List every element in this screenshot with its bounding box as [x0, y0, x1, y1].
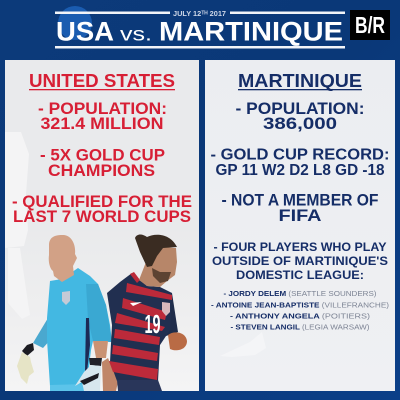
text: FIFA membership — [222, 192, 378, 225]
text: gold cup record — [210, 146, 390, 179]
player: striped jersey forward — [107, 234, 187, 391]
heading: Martinique: MARTINIQUE — [238, 70, 362, 91]
arm and sleeve — [166, 292, 178, 336]
list of players: - JORDY DELEM (SEATTLE SOUNDERS) — [224, 289, 376, 298]
shorts — [50, 384, 87, 391]
icon: faded soccer ball — [58, 6, 92, 40]
text: population: - POPULATION: — [236, 100, 364, 118]
swoosh — [130, 302, 142, 306]
text: four players: DOMESTIC LEAGUE: — [236, 268, 364, 282]
number 19: 19 — [144, 309, 160, 339]
stripes — [109, 283, 172, 380]
text: FIFA membership: FIFA — [278, 207, 322, 225]
header — [55, 11, 345, 48]
text: population: - POPULATION: — [38, 100, 167, 118]
text: gold cup record: GP 11 W2 D2 L8 GD -18 — [216, 162, 385, 179]
sleeve shading — [86, 284, 112, 342]
wrist band — [89, 358, 102, 366]
text: population: 386,000 — [263, 115, 337, 133]
wrist band — [22, 343, 34, 356]
panel: Martinique — [205, 60, 395, 391]
collar — [130, 272, 140, 283]
glove — [75, 365, 101, 391]
text: population — [38, 100, 167, 133]
crest — [62, 291, 70, 305]
text: population: 321.4 MILLION — [40, 115, 164, 133]
text: world cups: - QUALIFIED FOR THE — [12, 193, 192, 211]
jersey — [47, 268, 112, 386]
forearm — [93, 341, 108, 358]
glove — [17, 352, 34, 384]
faded background figure — [220, 332, 266, 357]
crest — [162, 302, 170, 316]
text: world cups — [12, 193, 192, 226]
text: four players: - FOUR PLAYERS WHO PLAY — [214, 240, 386, 254]
text: gold cup champions: - 5X GOLD CUP — [40, 146, 165, 164]
heading: United States: UNITED STATES — [29, 70, 175, 91]
beard — [152, 268, 171, 283]
logo: B/R — [350, 10, 390, 40]
head — [49, 235, 77, 282]
neck and face — [139, 247, 177, 287]
hair — [135, 234, 177, 267]
list of players — [211, 289, 389, 332]
title: Martinique: MARTINIQUE — [159, 16, 343, 46]
text: gold cup champions: CHAMPIONS — [48, 162, 155, 180]
shorts — [117, 380, 162, 391]
sleeve — [33, 318, 52, 348]
text: gold cup champions — [40, 146, 165, 180]
date: JULY 12ᵀᴴ 2017 — [173, 11, 226, 18]
text: FIFA membership: - NOT A MEMBER OF — [222, 192, 378, 210]
list of players: - ANTHONY ANGELA (POITIERS) — [230, 312, 370, 320]
faded background figure — [5, 132, 30, 319]
title: vs: vs. — [120, 24, 152, 46]
list of players: - STEVEN LANGIL (LEGIA WARSAW) — [230, 322, 370, 332]
player: goalkeeper in blue — [17, 235, 118, 391]
list of players: - ANTOINE JEAN-BAPTISTE (VILLEFRANCHE) — [211, 300, 389, 310]
logo: B/R: B/R — [355, 12, 385, 38]
text: population — [236, 100, 364, 133]
text: world cups: LAST 7 WORLD CUPS — [13, 208, 191, 226]
text: four players: OUTSIDE OF MARTINIQUE'S — [212, 254, 388, 268]
text: gold cup record: - GOLD CUP RECORD: — [210, 146, 390, 164]
jersey — [107, 273, 172, 381]
title: USA: USA — [56, 16, 114, 46]
panel: United States — [5, 60, 199, 391]
text: four players — [212, 240, 388, 282]
